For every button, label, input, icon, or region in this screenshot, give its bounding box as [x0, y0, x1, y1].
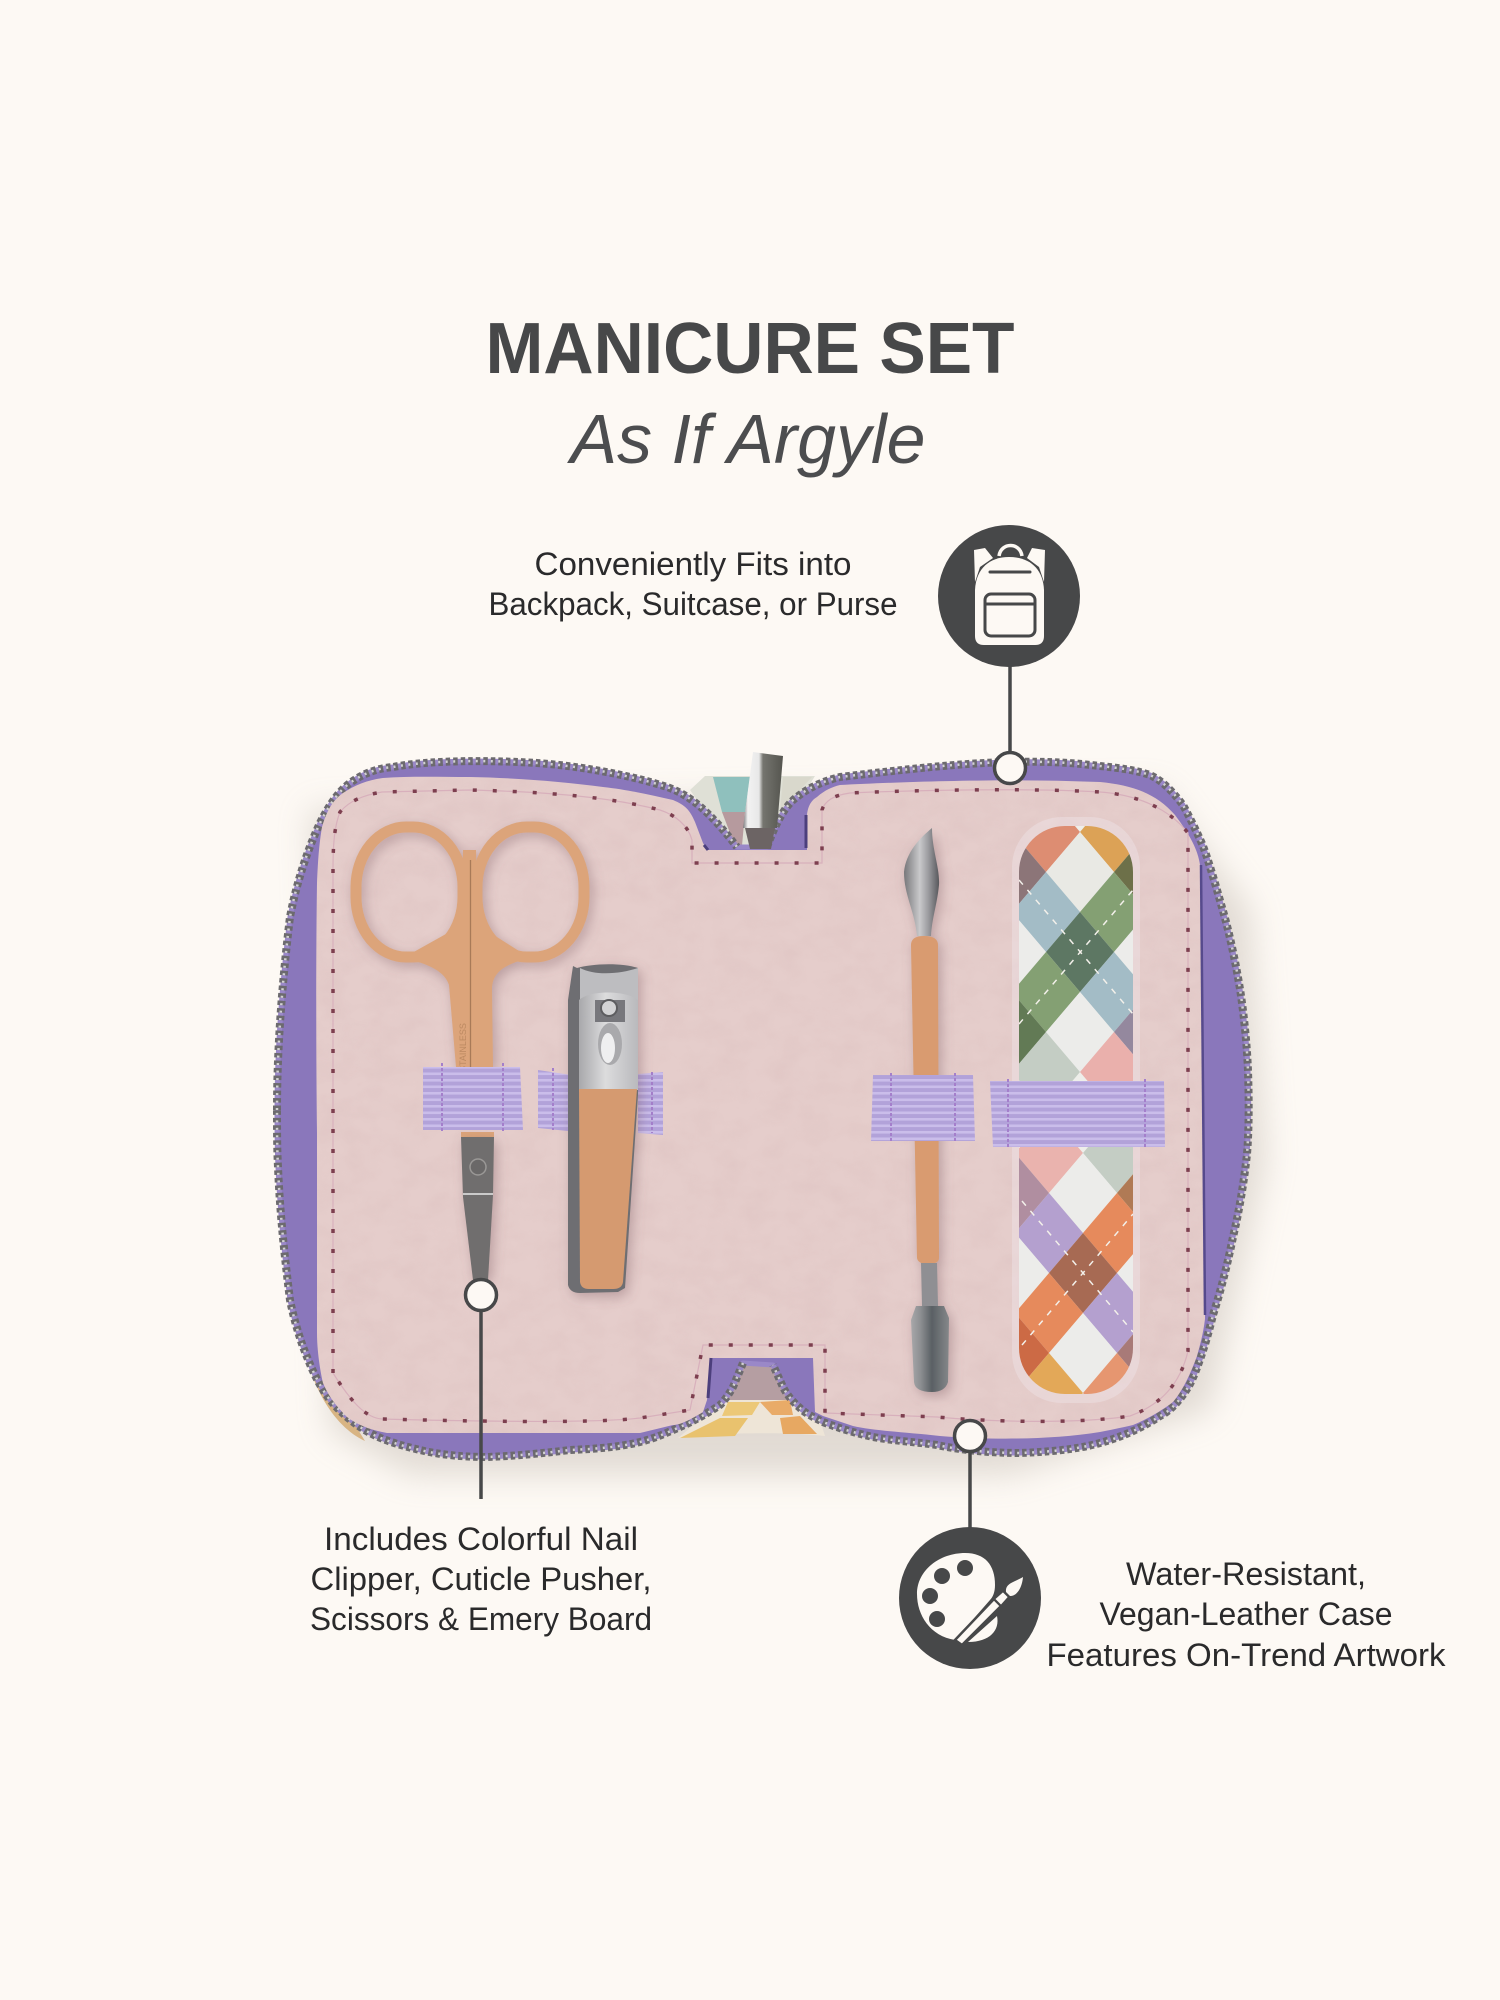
case exterior fabric at top notch [690, 776, 815, 850]
callout text: water-resistant case: Water-Resistant, [1126, 1556, 1366, 1592]
cuticle pusher [904, 828, 949, 1392]
elastic band 3 [871, 1073, 975, 1143]
callout text: fits into backpack: Conveniently Fits into [534, 546, 852, 582]
callout text: water-resistant case [1046, 1556, 1447, 1673]
elastic band 2 [538, 1068, 663, 1135]
pink felt interior [300, 770, 1220, 1450]
lower argyle [1019, 1147, 1133, 1394]
elastic band 1 [423, 1063, 523, 1133]
zipper pull [743, 752, 783, 849]
soft case shadow [310, 790, 1266, 1475]
callout line and dot: scissors [466, 1280, 496, 1499]
icon: artist palette [899, 1527, 1041, 1669]
callout text: fits into backpack [488, 546, 898, 622]
case exterior fabric at bottom notch [312, 1350, 825, 1441]
argyle stitches [1019, 880, 1133, 1345]
callout text: fits into backpack: Backpack, Suitcase, or Purse [488, 586, 898, 622]
callout line and dot: case [954, 1420, 986, 1530]
emery board [1012, 817, 1140, 1403]
subtitle: As If Argyle [567, 400, 926, 478]
callout text: water-resistant case: Features On-Trend Artwork [1046, 1637, 1447, 1673]
upper argyle [1019, 826, 1133, 1081]
callout text: water-resistant case: Vegan-Leather Case [1100, 1596, 1392, 1632]
callout text: included tools: Includes Colorful Nail [324, 1521, 638, 1557]
callout text: included tools [310, 1521, 652, 1637]
scissors [356, 827, 584, 1280]
callout text: included tools: Clipper, Cuticle Pusher, [310, 1561, 652, 1597]
manicure case [277, 752, 1249, 1457]
elastic band 4 [990, 1079, 1165, 1149]
callout line and dot: top [994, 665, 1026, 784]
nail clipper [568, 964, 638, 1293]
scissors: STAINLESS [458, 1023, 468, 1072]
callout text: included tools: Scissors & Emery Board [310, 1601, 652, 1637]
zipper teeth [277, 761, 1249, 1457]
stitching [333, 790, 1188, 1422]
icon: backpack [938, 525, 1080, 667]
title: MANICURE SET [486, 309, 1015, 389]
zipper tape [277, 761, 1249, 1457]
